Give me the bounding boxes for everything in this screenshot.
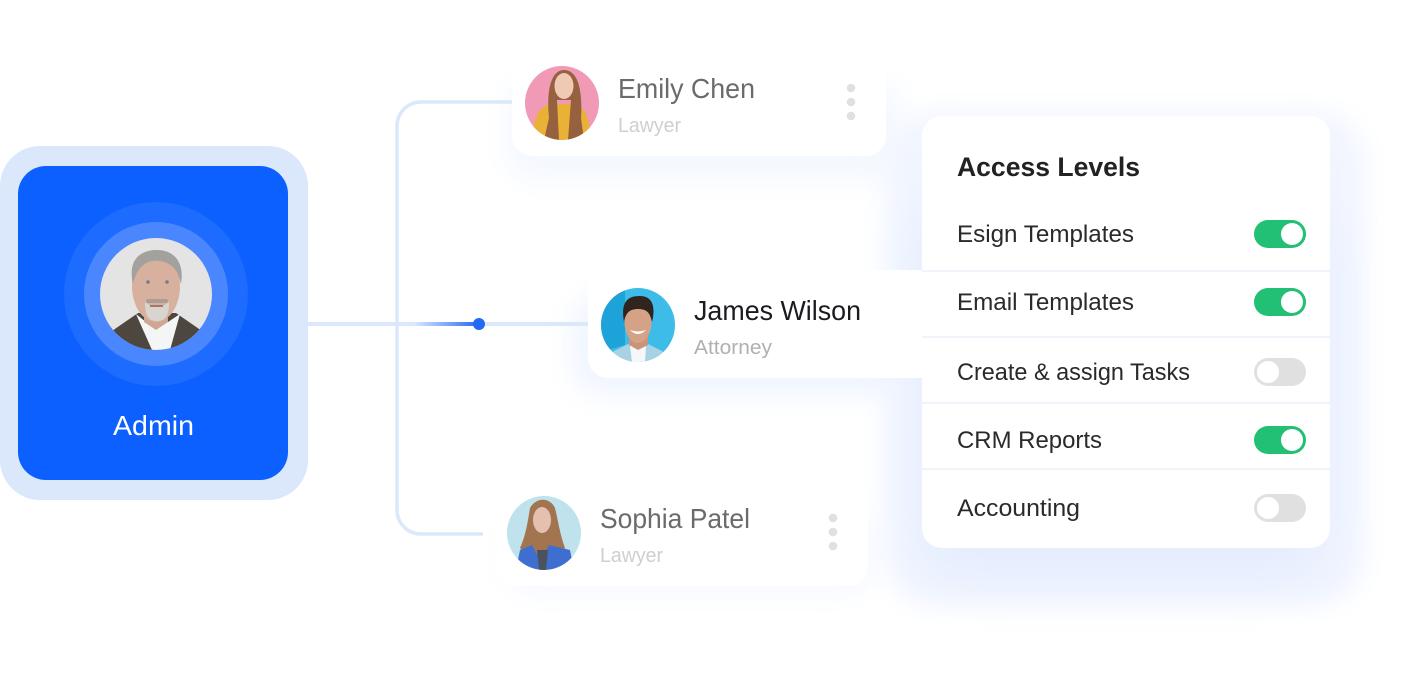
heading: Access Levels (957, 152, 1140, 182)
row: Email Templates (957, 288, 1306, 316)
soft glow: access levels panel (885, 112, 1365, 604)
menu dots (829, 514, 837, 550)
icon: Emily portrait (525, 66, 599, 140)
row: CRM Reports (957, 426, 1306, 454)
name: Sophia Patel (600, 503, 750, 534)
icon: admin portrait (100, 238, 212, 352)
member card: James Wilson (588, 270, 938, 378)
admin card (0, 146, 308, 500)
row: Create & assign Tasks (957, 358, 1306, 386)
connector lines (306, 102, 590, 534)
connector dot (473, 318, 485, 330)
role: Lawyer (600, 545, 663, 567)
member card: Emily Chen (516, 66, 886, 156)
row: Accounting (957, 494, 1306, 522)
row: CRM Reports: CRM Reports (957, 427, 1102, 454)
row: Esign Templates: Esign Templates (957, 221, 1134, 248)
panel: access levels (922, 116, 1330, 548)
icon: James portrait (601, 288, 675, 362)
row: Create & assign Tasks: Create & assign Tasks (957, 359, 1190, 386)
soft glow: member cards (504, 80, 922, 594)
row: Email Templates: Email Templates (957, 289, 1134, 316)
icon: Sophia portrait (507, 496, 581, 570)
row: Accounting: Accounting (957, 495, 1080, 522)
role: Lawyer (618, 115, 681, 137)
name: Emily Chen (618, 73, 755, 104)
member card: Sophia Patel (507, 496, 868, 580)
menu dots (847, 84, 855, 120)
row: Esign Templates (957, 220, 1306, 248)
admin label: Admin (113, 410, 194, 441)
name: James Wilson (694, 295, 861, 326)
role: Attorney (694, 337, 772, 359)
